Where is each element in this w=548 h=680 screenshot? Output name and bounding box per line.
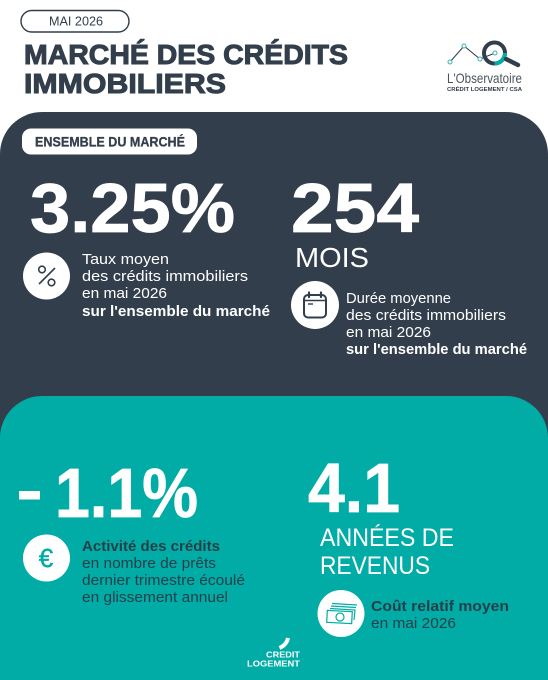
section badge: ENSEMBLE DU MARCHÉ [35,134,185,150]
icon: percent [23,252,70,300]
stat: -1.1%: 1.1% [55,454,198,532]
text: activité des crédits: en glissement annuel [82,589,228,606]
text: activité des crédits: dernier trimestre écoulé [82,572,245,589]
text: durée moyenne: des crédits immobiliers [346,307,506,324]
text: durée moyenne: en mai 2026 [346,324,431,341]
text: taux moyen [82,251,270,320]
text: durée moyenne [346,290,527,358]
text: coût relatif [371,598,509,632]
text: activité des crédits: en nombre de prêts [82,555,216,572]
text: coût relatif: en mai 2026 [371,615,456,632]
text: durée moyenne: Durée moyenne [346,290,451,307]
date pill [21,10,129,32]
icon: euro: € [39,543,54,573]
logo: L'Observatoire: L'Observatoire [447,70,522,86]
stat: 254 mois [291,169,419,273]
text: taux moyen: sur l'ensemble du marché [82,303,270,320]
title: IMMOBILIERS [24,68,226,99]
text: taux moyen: en mai 2026 [82,285,167,302]
logo: Crédit Logement: CREDIT [266,650,301,660]
icon: euro [23,534,70,582]
icon: calendar [291,281,339,329]
title: MARCHÉ DES CRÉDITS [24,39,348,70]
logo: L'Observatoire [447,42,522,93]
text: coût relatif: Coût relatif moyen [371,598,509,615]
logo: Crédit Logement [247,638,301,668]
logo: L'Observatoire: CRÉDIT LOGEMENT / CSA [447,85,522,93]
logo: Crédit Logement: LOGEMENT [247,658,301,668]
text: activité des crédits: Activité des crédits [82,538,220,555]
text: durée moyenne: sur l'ensemble du marché [346,341,527,358]
stat: 254 mois: 254 [291,169,419,247]
stat: 3.25%: 3.25% [30,169,235,247]
text: activité des crédits [82,538,245,606]
stat: 4.1 années de revenus [308,449,454,580]
panel: ensemble du marché [0,112,548,460]
title [24,39,348,99]
text: taux moyen: Taux moyen [82,251,169,268]
stat: 254 mois: MOIS [295,242,369,273]
date pill: MAI 2026 [49,14,103,28]
stat: 4.1 années de revenus: 4.1 [308,449,400,527]
stat: 4.1 années de revenus: ANNÉES DE [320,523,454,552]
stat: 4.1 années de revenus: REVENUS [320,552,430,580]
panel: indicateurs [0,396,548,680]
icon: banknotes [318,590,364,637]
text: taux moyen: des crédits immobiliers [82,268,248,285]
section badge [22,128,197,154]
